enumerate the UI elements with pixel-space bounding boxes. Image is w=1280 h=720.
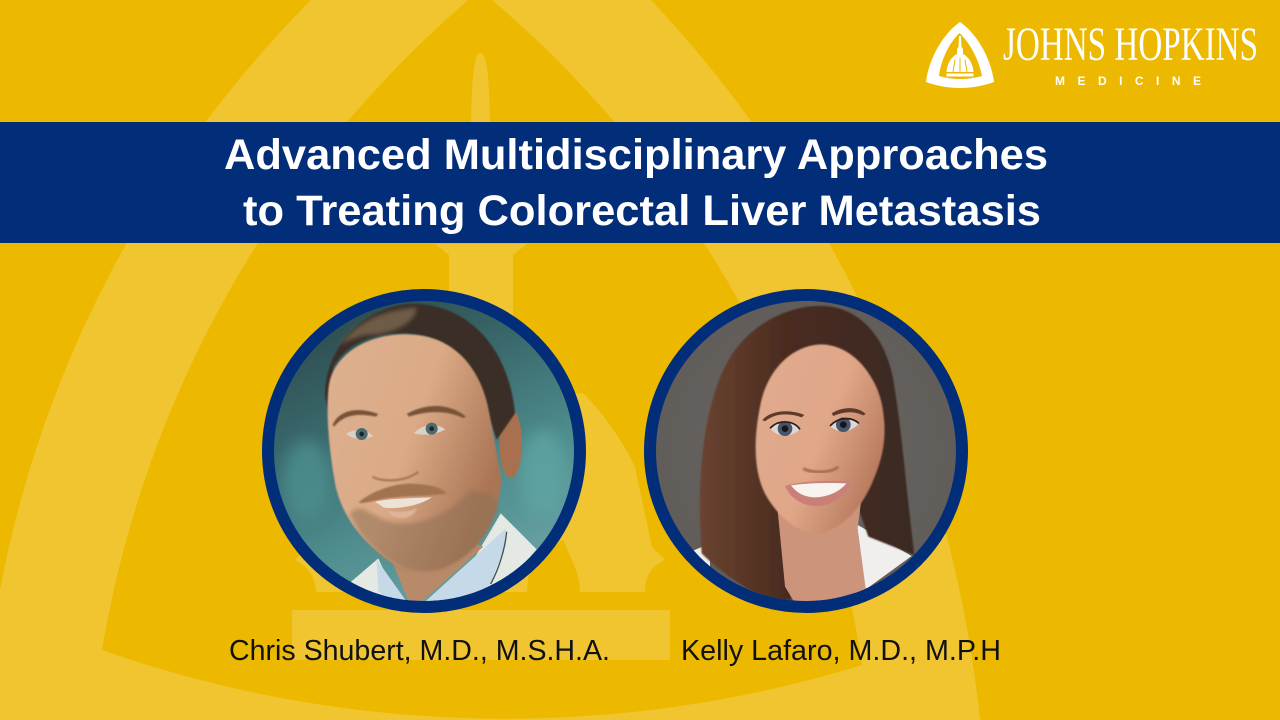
logo subtitle: MEDICINE: [1055, 74, 1201, 88]
mouth: [375, 497, 432, 508]
face: [328, 334, 502, 572]
beard shading: [350, 490, 498, 571]
shirt: [377, 528, 506, 605]
photo: Kelly Lafaro: [656, 301, 956, 601]
brows: [333, 406, 466, 427]
mouth: [785, 481, 852, 506]
white coat: [350, 514, 537, 599]
moustache: [358, 484, 447, 503]
logo shield icon: [926, 22, 994, 88]
name: Kelly Lafaro: Kelly Lafaro, M.D., M.P.H: [681, 635, 1001, 667]
eyes: [770, 419, 859, 436]
photo: Chris Shubert: [274, 301, 574, 601]
nose: [803, 467, 838, 472]
shirt edge: [491, 532, 507, 584]
title text: Advanced Multidisciplinary Approaches: [224, 131, 1048, 179]
face: [756, 344, 885, 533]
nose: [373, 472, 418, 480]
watermark: Johns Hopkins shield and dome: [0, 0, 980, 720]
name: Chris Shubert: Chris Shubert, M.D., M.S.H.A.: [229, 635, 610, 667]
portrait ring: Kelly Lafaro: [650, 295, 962, 607]
title text: to Treating Colorectal Liver Metastasis: [243, 187, 1041, 235]
brows: [762, 408, 866, 421]
neck: [777, 497, 866, 603]
hair: [325, 304, 515, 440]
portrait: Kelly Lafaro: [646, 291, 966, 611]
hair: [700, 306, 914, 600]
white coat: [694, 525, 912, 593]
ear: [499, 409, 522, 478]
portrait: Chris Shubert: [264, 291, 584, 611]
eyes: [346, 425, 445, 439]
logo: Johns Hopkins Medicine: [926, 18, 1258, 88]
portrait ring: Chris Shubert: [268, 295, 580, 607]
title banner: [0, 122, 1280, 243]
neck: [390, 540, 483, 601]
